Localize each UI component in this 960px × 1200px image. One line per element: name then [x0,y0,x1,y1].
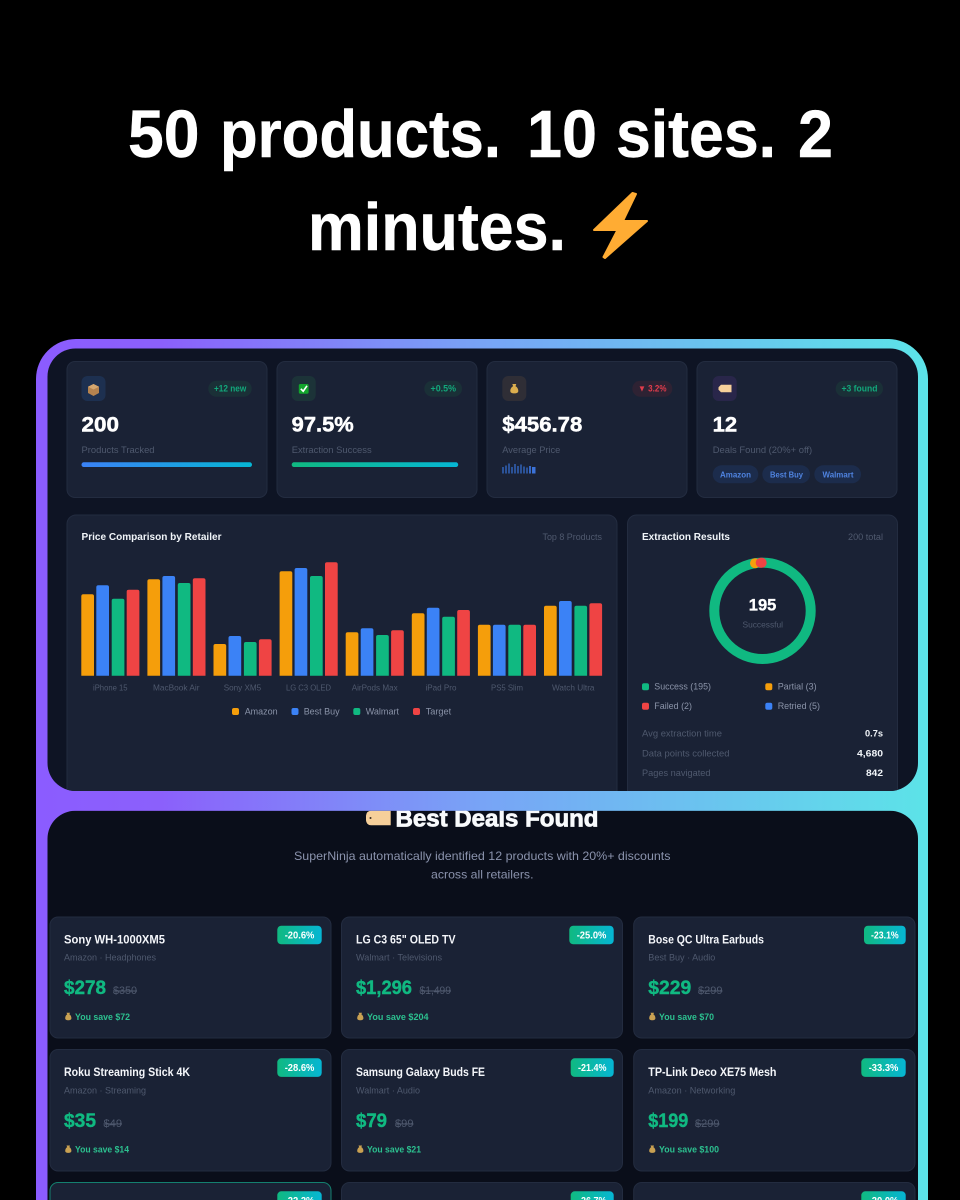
title: 10 [527,97,597,172]
chart subtitle: Top 8 Products [542,532,602,542]
badge: +0.5% [430,384,456,394]
chart legend: Target [426,707,452,717]
title: 50 [128,97,200,172]
deal card: row 3 right [634,1182,915,1200]
badge [632,381,672,397]
description: SuperNinja automatically identified 12 products with 20%+ discounts [294,849,670,863]
progress bar [292,462,458,467]
deal card: LG: LG C3 65" OLED TV [356,935,456,947]
discount badge: -23.1% [871,930,899,942]
discount badge [864,926,906,944]
tag: Amazon: Amazon [720,470,751,480]
badge [424,381,462,397]
label: Extraction Success [292,445,372,456]
deal card: row 3 left [50,1182,331,1200]
discount badge: -21.4% [578,1063,607,1074]
tag: Walmart [814,465,861,483]
deal card: Samsung: $99 [395,1118,414,1130]
deal card: Sony: Sony WH-1000XM5 [64,935,166,947]
deal card: LG: Walmart · Televisions [356,952,442,962]
deal card: Roku: $49 [104,1118,122,1130]
stats list: 4,680 [857,748,883,759]
stats list: Pages navigated [642,768,710,779]
badge: ▼ 3.2% [638,384,666,394]
deal card: Sony [50,917,331,1038]
stat card: products tracked [67,362,267,498]
badge: +3 found [842,384,878,394]
deal card: Samsung: Samsung Galaxy Buds FE [356,1067,485,1079]
panel: extraction results [628,515,898,791]
x axis labels: AirPods Max [352,682,398,692]
deal card: Roku: Amazon · Streaming [64,1085,146,1095]
discount badge: -33.3% [869,1063,898,1074]
value: $456.78 [502,414,583,437]
deal card: LG [342,917,622,1038]
stat card: deals found [697,362,897,498]
deal card: TP-Link: Amazon · Networking [648,1085,735,1095]
x axis labels: iPhone 15 [93,682,128,692]
label: Average Price [502,445,560,456]
x axis labels: MacBook Air [153,682,200,692]
donut chart [714,558,811,659]
deal card: Bose: You save $70 [659,1012,714,1023]
icon: check mark [292,376,316,401]
deal card: Bose: Best Buy · Audio [648,952,715,962]
icon: package [82,376,106,401]
icon: lightning bolt [594,193,647,258]
badge [208,381,252,397]
deal card: Sony: Amazon · Headphones [64,952,156,962]
badge: +12 new [214,384,247,394]
stats list: Data points collected [642,748,730,759]
status legend: Retried (5) [778,701,820,711]
deal card: row 3 middle [342,1182,622,1200]
deal card: Bose: $229 [648,977,691,999]
deal card: LG: $1,499 [420,985,451,997]
chart legend: Walmart [366,707,399,717]
status legend [642,681,820,711]
deal card: Bose: Bose QC Ultra Earbuds [648,935,764,947]
deal card: TP-Link: You save $100 [659,1145,719,1156]
stats list [642,729,883,779]
deal card: Samsung: Walmart · Audio [356,1085,420,1095]
value: 97.5% [292,414,354,437]
x axis labels: Sony XM5 [224,682,261,692]
title: products. [220,97,501,172]
title: minutes. [308,190,566,265]
stat card: average price [487,362,687,498]
deal card: TP-Link [634,1050,915,1171]
x axis labels: LG C3 OLED [286,682,331,692]
x axis labels: iPad Pro [426,682,457,692]
stats list: 0.7s [865,729,883,740]
panel title: Extraction Results [642,531,730,543]
discount badge [571,1058,614,1077]
sparkline bars [502,464,536,474]
panel subtitle: 200 total [848,532,883,542]
chart legend: Amazon [245,707,278,717]
deal card: Samsung: You save $21 [367,1145,422,1156]
panel: dashboard [48,348,918,791]
discount badge [569,926,614,944]
deal card: TP-Link: $199 [648,1110,688,1132]
status legend: Partial (3) [778,681,817,691]
deal card: Bose [634,917,915,1038]
deal card: Roku [50,1050,331,1171]
deal card: TP-Link: $299 [695,1118,720,1130]
deal card: Sony: $350 [113,985,137,997]
discount badge: -25.0% [577,930,606,942]
x axis labels [94,684,594,692]
discount badge [277,1058,322,1077]
stats list: 842 [866,768,883,779]
title [128,97,833,265]
icon: money bag [502,376,526,401]
tag: Best Buy: Best Buy [770,470,803,480]
value: 12 [713,414,737,437]
deal card: Bose: $299 [698,985,722,997]
x axis labels: Watch Ultra [552,682,595,692]
status legend: Success (195) [654,681,711,691]
chart title: Price Comparison by Retailer [82,531,222,543]
tag: Walmart: Walmart [822,470,854,480]
discount badge: -28.6% [285,1063,314,1074]
deal card: LG: $1,296 [356,977,412,999]
tag: Amazon [713,465,758,483]
icon: price tag [366,811,391,825]
discount badge [277,926,322,944]
panel: price comparison chart [67,515,617,791]
progress bar [82,462,252,467]
heading: Best Deals Found [396,806,598,833]
icon: price tag [713,376,737,401]
chart legend: Best Buy [304,707,340,717]
bar chart [81,562,602,676]
deal card: Roku: $35 [64,1110,96,1132]
chart legend [232,708,452,716]
donut caption: Successful [742,619,783,629]
description: across all retailers. [431,867,534,881]
deal card: Roku: You save $14 [75,1145,130,1156]
badge [836,381,883,397]
deal card: LG: You save $204 [367,1012,429,1023]
title: 2 [798,97,833,172]
deal card: Samsung [342,1050,622,1171]
deal card: TP-Link: TP-Link Deco XE75 Mesh [648,1067,776,1079]
description [294,849,670,881]
deal card: Sony: $278 [64,977,106,999]
tag: Best Buy [762,465,810,483]
status legend: Failed (2) [654,701,692,711]
panel: best deals [48,806,918,1200]
deal card: Samsung: $79 [356,1110,387,1132]
gradient frame [36,339,928,1200]
deal card: Roku: Roku Streaming Stick 4K [64,1067,191,1079]
deal card: Sony: You save $72 [75,1012,130,1023]
stats list: Avg extraction time [642,729,722,740]
label: Products Tracked [82,445,154,456]
x axis labels: PS5 Slim [491,682,523,692]
value: 200 [82,414,119,437]
discount badge: -20.6% [285,930,314,942]
title: sites. [616,97,776,172]
discount badge [861,1058,906,1077]
label: Deals Found (20%+ off) [713,445,812,456]
stat card: extraction success [277,362,477,498]
donut value: 195 [749,597,776,615]
